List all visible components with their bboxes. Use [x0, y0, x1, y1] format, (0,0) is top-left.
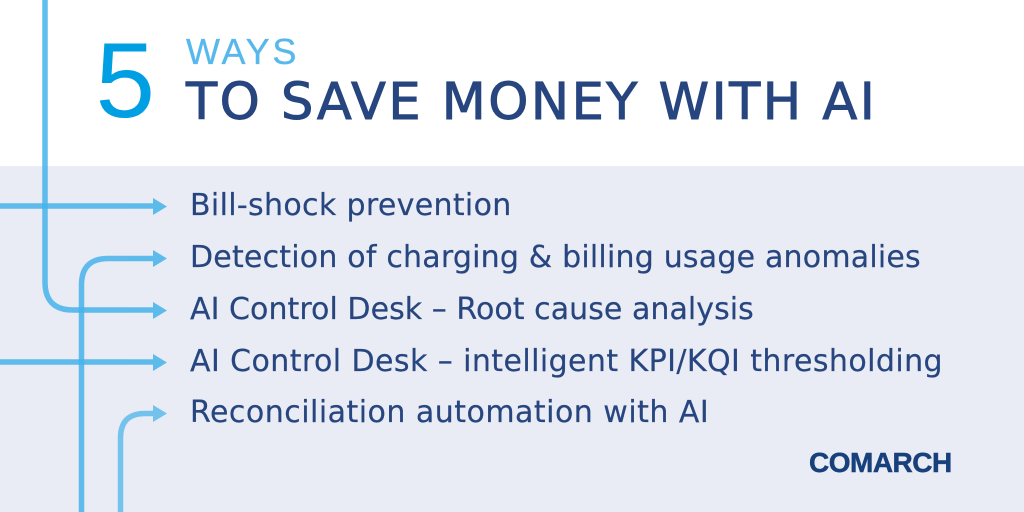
list item 3: AI Control Desk – Root cause analysis — [190, 292, 754, 327]
list item 5: Reconciliation automation with AI — [190, 395, 709, 430]
title: ways: WAYS — [186, 31, 299, 72]
list item 1: Bill-shock prevention — [190, 188, 512, 223]
list item 4: AI Control Desk – intelligent KPI/KQI thresholding — [190, 344, 943, 379]
logo: Comarch: COMARCH — [809, 447, 952, 478]
list item 2: Detection of charging & billing usage anomalies — [190, 240, 921, 275]
title: to save money with AI: TO SAVE MONEY WITH AI — [186, 73, 877, 132]
background band — [0, 166, 1024, 512]
title number 5: 5 — [96, 20, 155, 140]
